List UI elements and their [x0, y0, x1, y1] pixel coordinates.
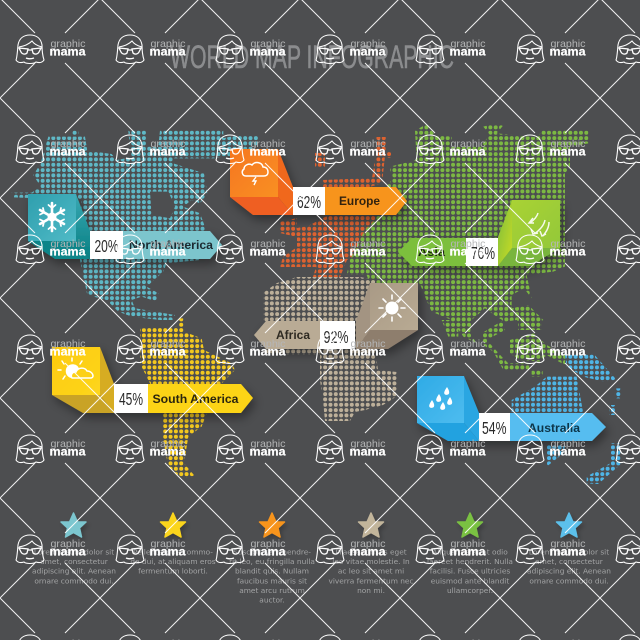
- icon: sun: [379, 295, 405, 321]
- title: WORLD MAP INFOGRAPHIC: [170, 39, 454, 75]
- text: column 2: Pellentesque commo-: [133, 548, 213, 556]
- text: column 3: rit leo, eu fringilla nulla: [229, 557, 315, 566]
- percent: 62%: 62%: [297, 192, 321, 212]
- star: beige: [358, 513, 384, 537]
- label: Australia: Australia: [528, 423, 581, 435]
- text: column 3: Suscipit sem hendre-: [233, 548, 311, 556]
- star: orange: [260, 513, 284, 537]
- star: blue: [556, 513, 582, 537]
- text: column 3: blandit quis. Nullam: [235, 567, 309, 576]
- text: column 1: amet, consectetur: [40, 557, 109, 566]
- text: column 3: amet arcu rutrum: [239, 586, 305, 595]
- callout: Europe: [230, 149, 407, 215]
- text: column 2: do dui, at aliquam eros: [130, 557, 216, 566]
- percent: 76%: 76%: [471, 243, 495, 263]
- percent: 54%: 54%: [482, 418, 506, 438]
- Hudson Bay gap: [150, 192, 175, 218]
- text: column 4: leo vitae molestie. In: [332, 557, 410, 566]
- text: column 5: ullamcorper.: [447, 586, 493, 595]
- descriptions row: [32, 548, 611, 604]
- icon: sun and cloud: [58, 358, 93, 379]
- stars row: [61, 513, 582, 537]
- text: column 5: laoreet hendrerit. Nulla: [427, 557, 513, 566]
- text: column 3: faucibus mauris sit: [237, 576, 307, 585]
- map: South America: [140, 318, 235, 478]
- map: Asia: [346, 125, 588, 377]
- icon: snowflake: [40, 203, 64, 231]
- percent: 20%: 20%: [94, 236, 118, 256]
- map: Europe: [280, 137, 391, 277]
- map: Africa: [263, 277, 396, 421]
- text: column 4: ac leo sit amet mi: [338, 567, 404, 576]
- star: teal: [61, 513, 86, 537]
- dotted world map: [0, 127, 640, 485]
- label: Europe: Europe: [339, 196, 380, 208]
- icon: rain drops: [429, 387, 452, 410]
- callout: Australia: [417, 376, 606, 441]
- callout: Asia: [398, 200, 560, 266]
- text: column 4: non mi.: [357, 586, 385, 595]
- text: column 5: Aliquam erat at odio: [432, 548, 508, 556]
- text: column 6: adipiscing elit. Aenean: [527, 567, 611, 576]
- text: column 5: facilisi. Fusce ultricies: [430, 567, 510, 576]
- callout: North America: [28, 194, 222, 259]
- text: column 1: ornare commodo dui.: [34, 576, 114, 585]
- callout: Africa: [254, 283, 418, 349]
- label: South America: South America: [152, 394, 239, 406]
- text: column 3: auctor.: [259, 596, 285, 604]
- text: column 6: ornare commodo dui.: [529, 576, 609, 585]
- label: Africa: Africa: [276, 330, 311, 342]
- icon: storm cloud: [242, 163, 268, 185]
- text: column 2: fermentum loborti.: [138, 567, 208, 576]
- star: yellow: [160, 513, 186, 537]
- text: column 6: amet, consectetur: [535, 557, 604, 566]
- label: Asia: Asia: [418, 247, 446, 259]
- text: column 4: Praesent risus eget: [335, 548, 407, 556]
- text: column 5: euismod ante blandit: [431, 576, 509, 585]
- map: North America: [12, 130, 258, 320]
- text: column 4: viverra fermentum nec: [328, 576, 414, 585]
- percent: 45%: 45%: [119, 389, 143, 409]
- callout: South America: [52, 347, 253, 413]
- percent: 92%: 92%: [324, 327, 348, 347]
- text: column 1: Lorem ipsum dolor sit: [34, 548, 114, 556]
- text: column 1: adipiscing elit. Aenean: [32, 567, 116, 576]
- label: North America: North America: [129, 240, 214, 252]
- text: column 6: Lorem ipsum dolor sit: [529, 548, 609, 556]
- icon: wind: [529, 213, 549, 236]
- map: Australia: [512, 353, 622, 484]
- star: green: [458, 513, 482, 537]
